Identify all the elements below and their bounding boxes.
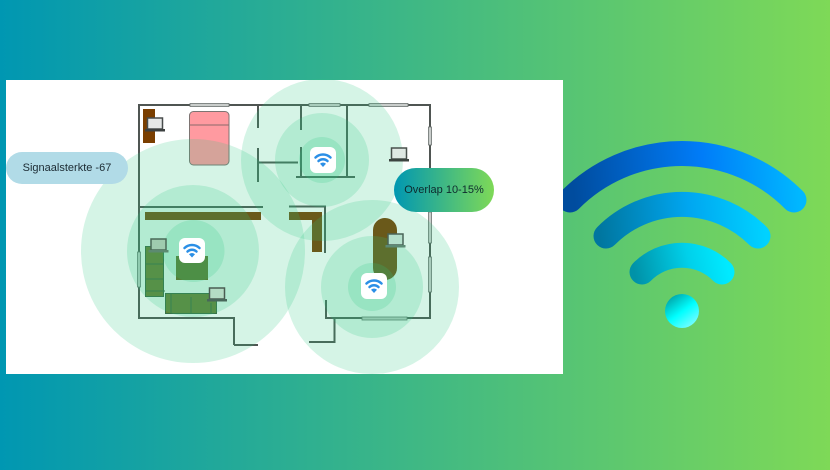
icon: laptop living room left: [148, 239, 168, 252]
furniture: [143, 109, 397, 314]
icon: router living room: [179, 238, 205, 263]
oval table: [373, 218, 397, 280]
icon: router lower room: [361, 273, 387, 299]
signal circle: upper room: [241, 79, 403, 241]
sofa: [146, 246, 216, 314]
signal circle: lower room: [285, 200, 459, 374]
signal circle: living room: [81, 139, 305, 363]
bed: [190, 112, 229, 165]
callout: signal strength: Signaalsterkte -67: [23, 162, 111, 174]
panel: floor plan background: [6, 80, 563, 374]
callout: signal strength: [6, 152, 128, 184]
icon: laptop living room right: [207, 288, 227, 302]
floor plan walls: [139, 105, 430, 345]
icon: laptop upper right: [389, 148, 409, 162]
windows: [138, 104, 432, 320]
icon: router upper room: [310, 147, 336, 173]
callout: overlap: [394, 168, 494, 212]
icon: laptop top left: [145, 118, 165, 132]
long shelf: [145, 212, 261, 220]
corner shelf: [289, 212, 322, 252]
icon: laptop lower room: [386, 234, 406, 248]
shelf top left: [143, 109, 155, 143]
icon: large wifi symbol: [570, 153, 794, 328]
center table: [176, 256, 208, 280]
callout: overlap: Overlap 10-15%: [404, 184, 484, 196]
